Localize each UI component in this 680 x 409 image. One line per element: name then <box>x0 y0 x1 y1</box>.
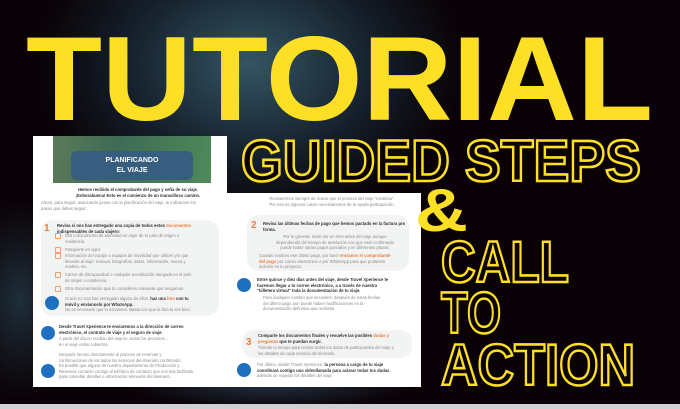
icon: email 2 <box>237 278 251 292</box>
step 2 box: dependiendo del tiempo de antelación con que esté confirmado <box>276 240 394 245</box>
step 1 box <box>41 220 219 316</box>
document page 1: para consultar detalles e información relevante del itinerario. <box>59 374 171 379</box>
intro text <box>76 187 200 198</box>
step 3 box: Comparte los documentos finales y resuelve las posibles dudas y <box>258 333 389 338</box>
step 3 box: Tómate tu tiempo para revisar todos los datos de participantes del viaje y <box>258 345 394 350</box>
step 2 box: del pago por correo electrónico o por WhatsApp para que podamos <box>259 259 385 264</box>
step 1 box: 1 <box>44 223 50 234</box>
step 1 box: residencia. <box>65 239 85 244</box>
document page 1: Desde Travel Xperience te enviaremos a la dirección de correo <box>59 324 184 329</box>
step 2 box: 2 <box>251 220 257 231</box>
document page 2: Para cualquier cambio que necesites, después de estas fechas <box>263 295 380 300</box>
step 1 box: móvil y envíanoslo por WhatsApp. <box>65 302 133 307</box>
heading box: PLANIFICANDO EL VIAJE <box>71 151 193 180</box>
intro text: ¡Enhorabuena! Esto es el comienzo de un maravilloso camino. <box>76 193 200 198</box>
outlined heading: GUIDED STEPS & CALL TO ACTION <box>241 130 641 398</box>
step 1 box: Información del equipo o equipos de movilidad que utilices y/o que <box>65 253 188 258</box>
document page 2: del último pago aun puede haber modificaciones en la <box>263 301 363 306</box>
icon: whatsapp circle <box>45 296 59 310</box>
document page 1 <box>33 136 227 387</box>
step 1 box: Otra documentación que tú consideres relevante que tengamos. <box>65 286 184 291</box>
step 2 box: puede haber varios pagos parciales y en diferentes plazos. <box>280 245 390 250</box>
document page 2: "billetera virtual" toda la documentación de tu viaje. <box>257 288 360 293</box>
step 3 box <box>242 330 412 358</box>
icon: video call <box>237 363 251 377</box>
step 1 box: indispensables de cada viajero: <box>57 229 120 234</box>
document page 1: A partir del día en reciban del seguro, todos los procesos ... <box>59 336 169 341</box>
step 1 box: Pasaporte en vigor. <box>65 247 101 252</box>
outlined heading: GUIDED STEPS & CALL TO ACTION: & <box>415 177 468 244</box>
step 3 box: preguntas que te puedan surgir. <box>258 339 322 344</box>
document page 2: Por eso es algunos casos necesitaremos de tu ayuda participación. <box>269 202 395 207</box>
intro text: Hemos recibido el comprobante del pago y seña de su viaje. <box>78 187 198 192</box>
document page 2: Revisaremos siempre de nuevo que el proceso del viaje "continúa". <box>269 196 395 201</box>
heading box: PLANIFICANDO EL VIAJE: PLANIFICANDO <box>106 157 158 164</box>
step 1 box: Si aún no nos has entregado alguno de ellos, haz una foto con tu <box>65 296 189 301</box>
document page 2 <box>227 193 421 387</box>
step 3 box: 3 <box>246 337 252 348</box>
document page 2: además de repasar los detalles del viaje. <box>257 373 333 378</box>
step 1 box: llevarás al viaje: manual, fotografías, datos, información, marca y <box>65 259 186 264</box>
document page 1: Después iremos directamente al proceso de reservas y <box>59 352 161 357</box>
document page 1: pasos que debes seguir: <box>41 206 87 211</box>
document page 1: Ahora, para seguir, avanzando juntos con la planificación del viaje, te indicamos los <box>41 200 196 205</box>
icon: phone <box>41 364 55 378</box>
document page 1: Reservas contacte contigo al teléfono de contacto que nos has facilitado <box>59 369 193 374</box>
outlined heading: GUIDED STEPS & CALL TO ACTION: ACTION <box>441 333 635 398</box>
document page 2: Entre quince y diez días antes del viaje, desde Travel Xperience te <box>257 277 388 282</box>
step 2 box: incluirlo en tu proyecto. <box>259 264 302 269</box>
document page 1: Es posible que alguno de nuestro departamento de Producción y <box>59 363 179 368</box>
step 2 box: Por lo general, suele ser un mes antes del viaje aunque <box>283 234 387 239</box>
step 2 box: Cuando realices ese último pago, por favor envíanos el comprobante <box>259 253 391 258</box>
document page 2: haremos llegar a tu correo electrónico, a a través de nuestra <box>257 283 377 288</box>
step 1 box: Revisa si nos has entregado una copia de todos estos documentos <box>57 223 191 228</box>
outlined heading: GUIDED STEPS & CALL TO ACTION: CALL <box>441 230 569 295</box>
outlined heading: GUIDED STEPS & CALL TO ACTION: GUIDED STEPS <box>241 130 641 194</box>
document page 2: documentación definitiva que recibirás. <box>263 306 335 311</box>
step 1 box: No es necesario que lo escanees. Basta con que la foto la ves bien. <box>65 307 191 312</box>
header banner <box>53 136 211 183</box>
step 3 box: los detalles de cada servicio del itinerario. <box>258 351 336 356</box>
step 1 box: de origen o residencia. <box>65 278 107 283</box>
document page 1: en el viaje están cubiertos. <box>59 342 109 347</box>
document page 2: coordinará contigo una videollamada para aclarar todas tus dudas, <box>257 368 391 373</box>
step 1 box: modelo, etc. <box>65 264 88 269</box>
step 2 box <box>247 215 409 271</box>
document page 2: Por último, desde Travel Xperience, la persona a cargo de tu viaje <box>257 362 383 367</box>
step 1 box: Carnet de discapacidad o cualquier acreditación otorgada en el país <box>65 272 191 277</box>
icon: email <box>41 326 55 340</box>
heading box: PLANIFICANDO EL VIAJE: EL VIAJE <box>116 166 148 174</box>
step 1 box: DNI o documento de identidad en vigor de tu país de origen o <box>65 233 179 238</box>
document page 1: electrónico, el contrato de viaje y el seguro de viaje. <box>59 330 163 335</box>
outlined heading: GUIDED STEPS & CALL TO ACTION: TO <box>441 281 501 346</box>
document page 1: confirmaciones de los lados los servicios del itinerario confirmado. <box>59 358 182 363</box>
step 2 box: forma. <box>263 227 276 232</box>
step 2 box: Revisa las últimas fechas de pago que hemos pactado en la factura pro <box>263 221 405 226</box>
